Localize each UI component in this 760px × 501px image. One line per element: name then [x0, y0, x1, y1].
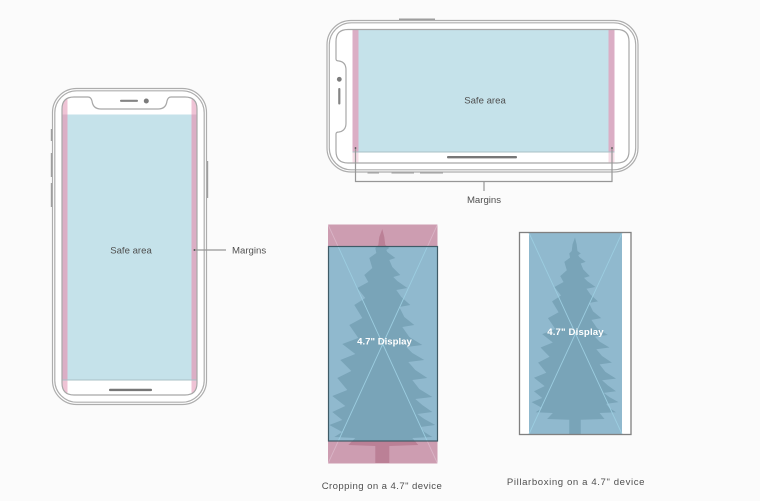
- screen margins and safe area: [352, 30, 614, 162]
- pillarboxing diagram: [507, 232, 645, 488]
- safe area label: Safe area: [110, 246, 152, 256]
- home indicator: [447, 156, 517, 158]
- white device area: [520, 232, 631, 434]
- speaker: [338, 88, 340, 104]
- visible display region: [329, 247, 437, 440]
- device body outline: [327, 20, 638, 172]
- display image: [529, 233, 622, 434]
- safe area label: Safe area: [464, 96, 506, 106]
- device buttons: [51, 129, 208, 207]
- screen outline with notch: [62, 97, 197, 395]
- caption: Cropping on a 4.7" device: [322, 481, 442, 492]
- cropped pink regions: [328, 224, 438, 464]
- infographic canvas: [50, 18, 644, 491]
- cropping diagram: [322, 224, 442, 492]
- home indicator: [109, 389, 152, 391]
- margins callout: Margins: [232, 246, 266, 256]
- display frame: [328, 246, 438, 441]
- display label: 4.7" Display: [357, 336, 412, 348]
- margins bracket: [355, 147, 613, 191]
- portrait iPhone: [51, 88, 266, 404]
- camera: [144, 98, 149, 104]
- tree: [532, 238, 618, 434]
- caption: Pillarboxing on a 4.7" device: [507, 477, 645, 488]
- margins label: Margins: [467, 195, 501, 206]
- device buttons: [368, 18, 443, 174]
- landscape iPhone: [327, 18, 638, 206]
- speaker: [120, 100, 138, 102]
- display label: 4.7" Display: [547, 327, 604, 338]
- camera: [337, 77, 342, 82]
- screen outline with notch: [336, 30, 629, 163]
- device frame: [520, 232, 631, 434]
- image diagonals: [529, 233, 622, 434]
- screen margins and safe area: [62, 97, 197, 395]
- device body outline: [52, 88, 206, 404]
- margins callout: [194, 246, 266, 256]
